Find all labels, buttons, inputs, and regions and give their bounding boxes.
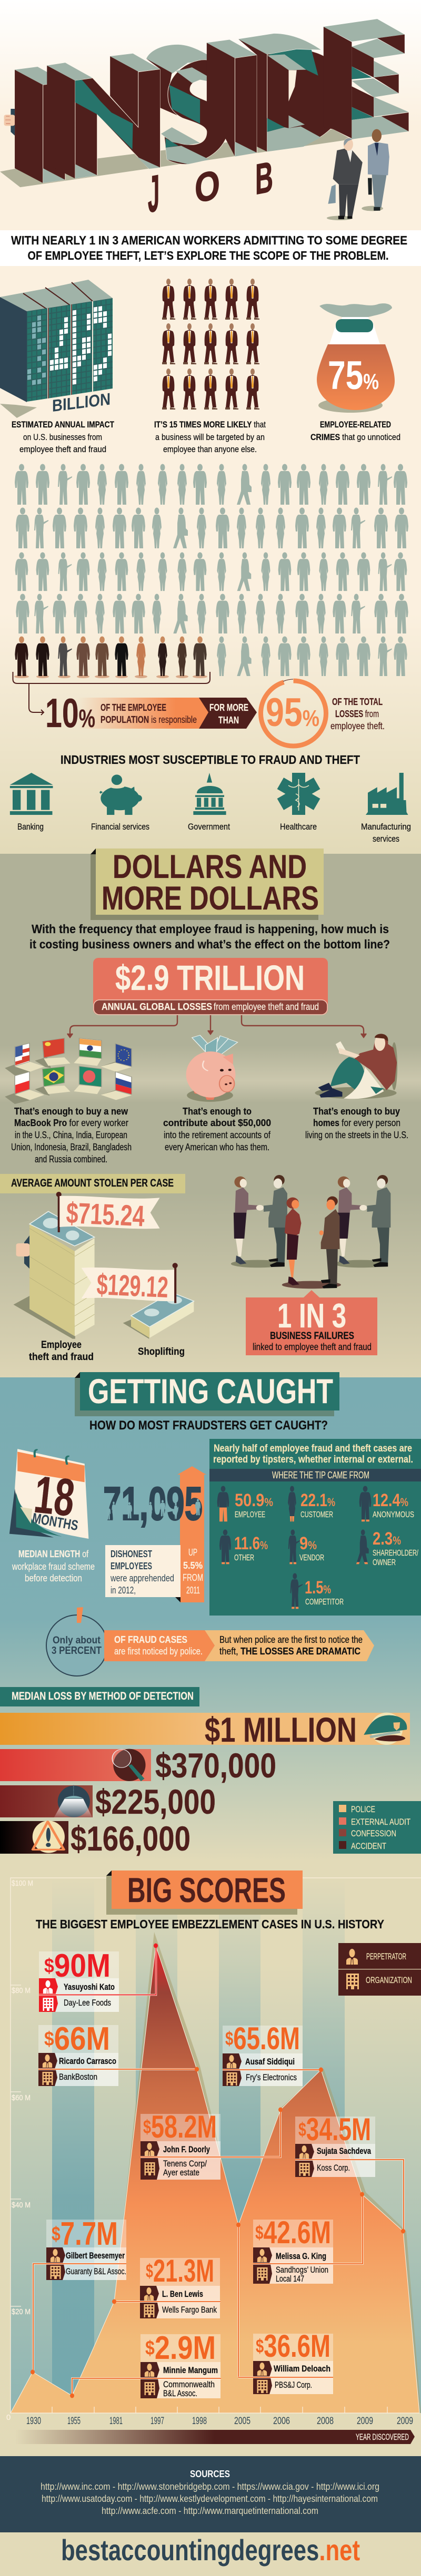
text on arrow: up 5.5% from 2011: UP [188,1547,197,1558]
panel: sources: SOURCES [190,2469,230,2479]
case card: $65.6M Ausaf Siddiqui [223,2021,323,2086]
case card: $58.2M John F. Doorly: Tenens Corp/ [163,2159,207,2169]
title word: JOB: O [195,161,220,212]
flag: Brazil [43,1067,64,1087]
case card: $66M Ricardo Carrasco: BankBoston [59,2072,97,2082]
stack labels: theft and fraud [29,1352,94,1363]
legend: detection methods [333,1801,421,1854]
caption: estimated annual impact: ESTIMATED ANNUAL IMPACT [12,420,114,430]
letter N [47,54,161,179]
text on arrow: up 5.5% from 2011: FROM [183,1572,203,1583]
caption: homes comparison: That’s enough to buy [313,1106,400,1117]
text on arrow: up 5.5% from 2011 [183,1547,203,1596]
two businessmen [327,129,389,220]
case card: $90M Yasuyoshi Kato: Yasuyoshi Kato [64,1982,115,1992]
value: $129.12: $129.12 [96,1267,169,1304]
caption: retirement comparison: into the retirement accounts of [164,1130,271,1140]
x-axis year labels: 2005 [234,2416,250,2427]
caption: 15 times more likely: employee than anyone else. [163,444,257,454]
hero illustration: 3D INSIDE title [0,19,409,220]
chart: cash stacks [14,1192,194,1339]
callout: $2.9 trillion: ANNUAL GLOBAL LOSSES [102,1001,212,1012]
case card: $66M Ricardo Carrasco [38,2021,199,2086]
caption: retirement comparison: That’s enough to [183,1106,252,1117]
caption: employee-related crimes: CRIMES that go unnoticed [310,432,400,442]
letter S [146,45,229,164]
flag: USA [15,1043,29,1066]
section title: big scores [106,1870,303,1915]
letter E [324,19,409,139]
circle callout: only about 3 percent: Only about [53,1635,101,1646]
case card: $36.6M William Deloach: William Deloach [274,2364,330,2374]
chart: stripes and axis: $100 M [12,1879,33,1888]
caption: estimated annual impact: on U.S. businesses from [23,432,102,442]
caption: median length: workplace fraud scheme [12,1561,95,1572]
tip: vendor 9%: VENDOR [299,1553,324,1562]
section intro text: it costing business owners and what’s the effect on the bottom line? [29,937,390,951]
chart: stripes and axis: $60 M [12,2093,31,2102]
tip table header [209,1469,421,1481]
x-axis year labels: 2009 [397,2416,413,2427]
calendar: 18 months: MONTHS [31,1510,79,1534]
industry labels: Healthcare [280,822,317,832]
number: 71,095 with people [103,1478,203,1530]
banner: 10% of employees for more than: FOR MORE [209,702,248,713]
building: $40 billion [0,280,113,418]
panel: dishonest employees: DISHONEST [111,1549,152,1559]
case card: $58.2M John F. Doorly: 58.2M [151,2109,217,2144]
tip: competitor 1.5%: 1.5% [305,1578,331,1598]
section title: big scores: BIG SCORES [127,1870,286,1909]
tip: employee 50.9%: EMPLOYEE [235,1510,265,1519]
case card: $42.6M Melissa G. King: Local 147 [276,2274,304,2284]
case card: $36.6M William Deloach: $ [256,2335,264,2357]
money bag: 75% [317,303,395,413]
tip: customer 22.1% [288,1486,335,1521]
case card: $2.9M Minnie Mangum: $ [145,2337,155,2359]
letter I [15,67,65,183]
bar: confession $225,000 [0,1782,216,1821]
title word: JOB [148,152,273,223]
banner: police noticing: theft, THE LOSSES ARE DRAMATIC [219,1646,360,1657]
case card: $58.2M John F. Doorly: John F. Doorly [163,2144,210,2154]
up arrow [177,1466,206,1602]
legend: detection methods: POLICE [351,1804,375,1814]
case card: $21.3M L. Ben Lewis [112,2253,220,2318]
arrows from callout [67,1015,366,1037]
industry labels: Banking [17,822,44,832]
chart: stripes and axis [6,1878,421,2422]
illustration: handshakes and failed business [231,1175,390,1289]
text: of the total losses [330,697,385,731]
tip: vendor 9% [288,1529,324,1564]
legend: detection methods: ACCIDENT [351,1841,386,1851]
caption: median length [12,1549,95,1583]
x-axis year labels [26,2416,413,2427]
heading: average amount stolen: AVERAGE AMOUNT STOLEN PER CASE [11,1177,174,1189]
title word: JOB: B [255,152,273,204]
tip: other 11.6% [219,1529,268,1564]
tip: shareholder/owner 2.3% [356,1529,418,1567]
callout: $2.9 trillion [93,958,328,1015]
panel: dishonest employees: were apprehended [110,1573,174,1583]
text on arrow: up 5.5% from 2011: 2011 [186,1585,200,1596]
caption: macbook comparison: and Russia combined. [35,1154,107,1164]
case card: $34.5M Sujata Sachdeva [295,2112,405,2233]
tip: competitor 1.5%: COMPETITOR [305,1598,344,1607]
caption: macbook comparison: Union, Indonesia, Brazil, Bangladesh [11,1142,132,1152]
caption: macbook comparison: That’s enough to buy a new [14,1106,128,1117]
icon: financial services piggy bank [99,775,142,815]
caption: estimated annual impact: employee theft and fraud [19,444,106,454]
case card: $90M Yasuyoshi Kato: $ [44,1955,54,1977]
case card: $2.9M Minnie Mangum: B&L Assoc. [163,2388,197,2398]
employee theft stack [29,1211,95,1336]
section title: dollars and more dollars [91,849,324,920]
caption: retirement comparison: contribute about $50,000 [163,1118,271,1128]
bar: accident $166,000 [0,1819,191,1858]
text: of the total losses: OF THE TOTAL [332,697,383,707]
callout: 1 in 3 business failures: 1 IN 3 [277,1296,346,1335]
crowd silhouettes: row 2 [16,508,408,548]
banner: police noticing [104,1630,374,1661]
x-axis year labels: 1955 [67,2416,81,2427]
section title: dollars and more dollars: MORE DOLLARS [102,880,319,917]
flag: Bangladesh [79,1066,102,1087]
section intro text [29,922,390,951]
tip: anonymous 12.4%: 12.4% [373,1490,408,1510]
industry labels: Government [188,822,230,832]
banner: police noticing: are first noticed by police. [114,1646,203,1657]
bar: confession $225,000: $225,000 [95,1782,216,1821]
case card: $2.9M Minnie Mangum: Minnie Mangum [163,2365,218,2375]
money bag: 75%: 75% [328,353,379,398]
arrow bar: year discovered [15,2430,415,2444]
text on arrow: up 5.5% from 2011: 5.5% [183,1560,203,1571]
subheading: how do most fraudsters get caught: HOW DO MOST FRAUDSTERS GET CAUGHT? [89,1418,328,1433]
case card: $36.6M William Deloach: 36.6M [264,2328,330,2364]
case card: $21.3M L. Ben Lewis: $ [146,2260,153,2282]
banner: 10% of employees for more than: 10% [45,690,95,736]
ground shadow [0,129,352,187]
case card: $7.7M Gilbert Beesemyer [31,2216,126,2374]
case card: $2.9M Minnie Mangum: 2.9M [155,2330,216,2366]
case card: $90M Yasuyoshi Kato: Day-Lee Foods [64,1998,111,2008]
x-axis year labels: 1930 [26,2416,41,2427]
shoplifting stack [131,1292,194,1338]
laptops with flags [5,1038,132,1104]
flag: European Union [115,1044,132,1067]
x-axis year labels: 2008 [317,2416,334,2427]
callout: $2.9 trillion: from employee theft and fraud [214,1001,319,1012]
circle callout: only about 3 percent: 3 PERCENT [52,1645,102,1657]
case card: $66M Ricardo Carrasco: $ [44,2028,54,2050]
bar: external audit $370,000: $370,000 [155,1746,276,1785]
x-axis year labels: 1997 [151,2416,164,2427]
icon: government dome [193,773,226,815]
tip: employee 50.9% [217,1486,273,1521]
section title: dollars and more dollars: DOLLARS AND [113,849,307,885]
tip: customer 22.1%: CUSTOMER [300,1510,333,1519]
case card: $21.3M L. Ben Lewis: Wells Fargo Bank [162,2305,217,2315]
caption: homes comparison: homes for every person [313,1118,400,1128]
banner: 10% of employees for more than: THAN [218,715,239,725]
case card: $36.6M William Deloach: PBS&J Corp. [275,2380,312,2390]
caption: macbook comparison [11,1106,132,1164]
intro heading [11,233,407,262]
panel: dishonest employees [105,1545,181,1602]
case card: $58.2M John F. Doorly: $ [143,2116,151,2138]
flag: China [43,1038,64,1058]
peeking hand [16,1235,29,1269]
case card: $90M Yasuyoshi Kato: 90M [54,1948,111,1984]
callout: 1 in 3 business failures: BUSINESS FAILURES [270,1331,354,1342]
bar: accident $166,000: $166,000 [71,1819,191,1858]
flag: Russia [115,1072,132,1094]
section title: getting caught [75,1372,339,1416]
case card: $2.9M Minnie Mangum [70,2330,221,2398]
second letter I [207,39,257,157]
legend: perpetrator and organization [338,1943,421,1996]
case card: $42.6M Melissa G. King [253,2192,364,2284]
case card: $66M Ricardo Carrasco: Ricardo Carrasco [59,2056,116,2066]
flag: 129 [82,1263,178,1303]
panel: dishonest employees: EMPLOYEES [111,1561,152,1571]
case card: $7.7M Gilbert Beesemyer: Guaranty B&L Assoc. [66,2266,126,2276]
tip: vendor 9%: 9% [299,1534,317,1553]
caption: employee-related crimes: EMPLOYEE-RELATED [320,420,391,430]
case card: $42.6M Melissa G. King: Sandhogs’ Union [276,2265,328,2275]
heading: median loss by method of detection [0,1687,199,1706]
banner: 10% of employees for more than: POPULATION is responsible [101,714,197,725]
ring: 95%: 95% [266,690,319,735]
tip: shareholder/owner 2.3%: 2.3% [373,1529,401,1549]
icon: healthcare star of life [277,773,320,815]
caption: macbook comparison: MacBook Pro for every worker [14,1118,128,1128]
callout: 1 in 3 business failures [246,1290,377,1355]
callout: $2.9 trillion: $2.9 TRILLION [115,958,305,998]
panel: sources [0,2456,421,2532]
tip: shareholder/owner 2.3%: OWNER [373,1558,396,1567]
calendar: 18 months: 18 [32,1465,77,1528]
crowd silhouettes: row 5, the grey remainder [217,636,407,676]
case card: $21.3M L. Ben Lewis: L. Ben Lewis [162,2289,203,2299]
text: of the total losses: LOSSES from [335,709,379,719]
case card: $7.7M Gilbert Beesemyer: Gilbert Beesemyer [66,2251,125,2261]
section intro text: With the frequency that employee fraud is happening, how much is [32,922,389,936]
x-axis year labels: 1998 [192,2416,207,2427]
case card: $66M Ricardo Carrasco: 66M [54,2021,110,2057]
chart: stripes and axis: $40 M [12,2201,31,2210]
case card: $34.5M Sujata Sachdeva: Koss Corp. [317,2163,350,2173]
panel: dishonest employees: in 2012, [111,1585,136,1596]
title word: JOB: J [148,165,159,223]
caption: retirement comparison: every American who has them. [165,1142,269,1152]
tip: other 11.6%: 11.6% [234,1534,268,1553]
banner: police noticing: OF FRAUD CASES [114,1634,187,1645]
case card: $42.6M Melissa G. King: 42.6M [263,2215,331,2250]
tip table header: WHERE THE TIP CAME FROM [272,1470,369,1480]
tip: other 11.6%: OTHER [234,1553,254,1562]
bracket arrow from the ten employees [13,672,210,715]
letter D [238,34,346,151]
tip: anonymous 12.4% [359,1486,414,1521]
flag: 715 [56,1192,160,1232]
calendar: 18 months [9,1449,88,1539]
caption: employee-related crimes [310,420,400,442]
case card: $65.6M Ausaf Siddiqui: Ausaf Siddiqui [245,2057,295,2067]
number: 71,095 with people: 71,095 [103,1478,203,1530]
bar: external audit $370,000 [0,1746,276,1785]
caption: macbook comparison: in the U.S., China, India, European [15,1130,127,1140]
banner: 10% of employees for more than [45,690,257,736]
icon: banking [10,773,53,815]
caption: 15 times more likely: a business will be targeted by an [155,432,265,442]
case card: $36.6M William Deloach [236,2223,333,2394]
caption: 15 times more likely [154,420,266,454]
flag: India [79,1038,102,1058]
x-axis year labels: 2006 [273,2416,290,2427]
caption: retirement comparison [163,1106,271,1152]
heading: industries: INDUSTRIES MOST SUSCEPTIBLE TO FRAUD AND THEFT [61,753,360,766]
case card: $65.6M Ausaf Siddiqui: 65.6M [233,2021,300,2056]
panel: sources: http://www.acfe.com - http://www.marquetinternational.com [102,2506,318,2516]
banner: police noticing: But when police are the first to notice the [219,1634,363,1645]
value: $715.24: $715.24 [65,1196,145,1232]
caption: median length: MEDIAN LENGTH of [18,1549,89,1559]
chart: stripes and axis: $20 M [12,2307,31,2316]
caption: estimated annual impact [12,420,114,454]
case card: $2.9M Minnie Mangum: Commonwealth [163,2379,215,2389]
case card: $65.6M Ausaf Siddiqui: Fry’s Electronics [246,2072,297,2082]
footer brand: bestaccountingdegrees.net [61,2533,360,2567]
piggy bank with cash [186,1035,238,1102]
panel: where the tip came from [209,1439,421,1616]
chart: stripes and axis: 0 [6,2413,11,2422]
caption: homes comparison [305,1106,408,1140]
crowd silhouettes: row 4 [16,594,408,633]
stack labels [29,1340,185,1363]
industry labels: Financial services [91,822,149,832]
case card: $34.5M Sujata Sachdeva: 34.5M [306,2112,371,2147]
panel: sources: http://www.usatoday.com - http://www.kestlydevelopment.com - http://hayesinternational.com [42,2493,378,2504]
section title: getting caught: GETTING CAUGHT [88,1372,333,1410]
case card: $7.7M Gilbert Beesemyer: 7.7M [61,2216,118,2252]
bar: police $1 million [0,1710,410,1749]
tip: employee 50.9%: 50.9% [235,1490,273,1510]
tip: competitor 1.5% [290,1573,344,1609]
icon: manufacturing factory [366,773,408,815]
ring: 95% [261,679,326,746]
case card: $34.5M Sujata Sachdeva: Sujata Sachdeva [317,2146,371,2156]
tip: customer 22.1%: 22.1% [300,1490,335,1510]
case card: $34.5M Sujata Sachdeva: $ [298,2119,306,2140]
heading: average amount stolen [0,1174,185,1193]
x-axis year labels: 2009 [357,2416,373,2427]
x-axis year labels: 1981 [109,2416,123,2427]
case card: $42.6M Melissa G. King: Melissa G. King [276,2251,326,2261]
panel intro text [213,1443,413,1465]
banner: 10% of employees for more than: OF THE EMPLOYEE [101,702,166,713]
stack labels: Shoplifting [138,1346,185,1357]
crowd silhouettes: row 1 [15,464,407,505]
crowd: ten highlighted employees [14,636,207,678]
industry labels [17,822,411,844]
case card: $21.3M L. Ben Lewis: 21.3M [153,2253,214,2288]
stack labels: Employee [41,1340,82,1351]
circle callout: only about 3 percent [46,1607,107,1676]
homeless man [315,1034,397,1099]
pictogram: fifteen suited men [162,279,259,410]
peeking man [4,109,15,136]
legend: detection methods: CONFESSION [351,1828,396,1838]
chart: area of embezzlement amounts [11,1932,421,2413]
callout: 1 in 3 business failures: linked to employee theft and fraud [253,1342,372,1352]
flag: Poland [15,1072,29,1094]
case card: $65.6M Ausaf Siddiqui: $ [225,2028,233,2049]
text: of the total losses: employee theft. [330,721,385,731]
case card: $58.2M John F. Doorly: Ayer estate [163,2168,199,2178]
crowd silhouettes: row 3 [15,552,407,591]
case card: $58.2M John F. Doorly [141,2107,283,2180]
panel: sources: http://www.inc.com - http://www.stonebridgebp.com - https://www.cia.gov - http://www.ici.org [41,2481,379,2492]
label: BILLION: BILLION [52,389,111,415]
case card: $7.7M Gilbert Beesemyer: $ [52,2223,61,2245]
industry labels: Manufacturing [361,822,411,832]
case card: $42.6M Melissa G. King: $ [255,2222,263,2243]
case card: $90M Yasuyoshi Kato [39,1943,158,2012]
caption: median length: before detection [25,1573,82,1583]
bar: police $1 million: $1 MILLION [205,1710,357,1749]
chart: stripes and axis: $80 M [12,1986,31,1995]
caption: 15 times more likely: IT’S 15 TIMES MORE LIKELY that [154,420,266,430]
heading: median loss by method of detection: MEDIAN LOSS BY METHOD OF DETECTION [12,1690,194,1702]
industry labels: services [373,834,399,844]
